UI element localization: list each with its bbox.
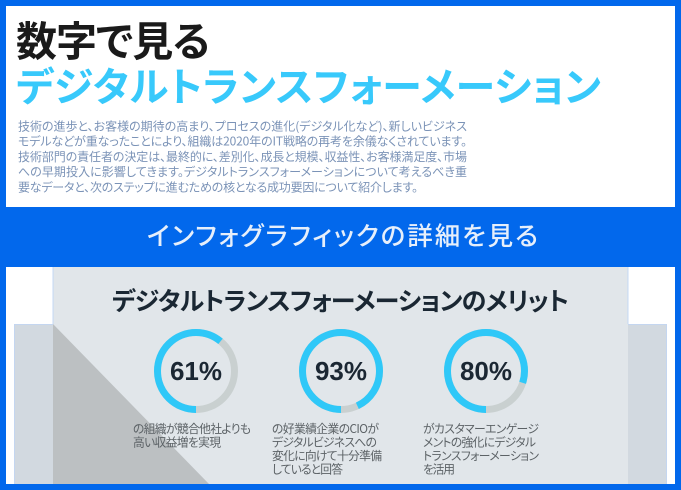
decorative triangle bbox=[53, 324, 209, 484]
title bbox=[16, 8, 601, 113]
stat: 80%: を活用 bbox=[423, 460, 455, 478]
stat: 93%: の好業績企業のCIOが bbox=[272, 420, 379, 437]
stat: 80%: トランスフォーメーション bbox=[423, 447, 539, 464]
intro text block: 技術部門の責任者の決定は、最終的に、差別化、成長と規模、収益性、お客様満足度、市場 bbox=[18, 148, 467, 165]
panel: side background bbox=[14, 324, 666, 484]
panel: merits bbox=[53, 267, 628, 484]
stat: 93%: デジタルビジネスへの bbox=[272, 434, 377, 450]
stat: 93%: 93% bbox=[315, 356, 367, 386]
stat: 80%: メントの強化にデジタル bbox=[423, 434, 536, 450]
stat: 61% bbox=[133, 332, 251, 450]
stat: 80% bbox=[423, 332, 539, 478]
intro text block bbox=[18, 118, 467, 196]
title: 数字で見る bbox=[16, 8, 210, 68]
stat: 80%: 80% bbox=[460, 356, 512, 386]
stat: 93%: 変化に向けて十分準備 bbox=[272, 447, 382, 464]
intro text block: 要なデータと、次のステップに進むための核となる成功要因について紹介します。 bbox=[18, 178, 418, 196]
stat: 80%: がカスタマーエンゲージ bbox=[423, 420, 539, 437]
stat: 61%: 高い収益増を実現 bbox=[133, 434, 221, 450]
stat: 61%: 61% bbox=[170, 356, 222, 386]
bottom frame edge bbox=[0, 484, 681, 490]
intro text block: 技術の進歩と、お客様の期待の高まり、プロセスの進化(デジタル化など)、新しいビジネス bbox=[18, 118, 467, 134]
title: デジタルトランスフォーメーション bbox=[16, 55, 601, 113]
call-to-action band: インフォグラフィックの詳細を見る bbox=[147, 216, 538, 253]
intro text block: への早期投入に影響してきます。デジタルトランスフォーメーションについて考えるべき重 bbox=[18, 163, 467, 180]
call-to-action band bbox=[2, 207, 681, 267]
stat: 93%: していると回答 bbox=[272, 460, 343, 478]
merits heading: デジタルトランスフォーメーションのメリット bbox=[112, 282, 569, 318]
stat: 93% bbox=[272, 332, 382, 478]
intro text block: モデルなどが重なったことにより、組織は2020年のIT戦略の再考を余儀なくされています。 bbox=[18, 132, 467, 150]
stat: 61%: の組織が競合他社よりも bbox=[133, 420, 251, 437]
